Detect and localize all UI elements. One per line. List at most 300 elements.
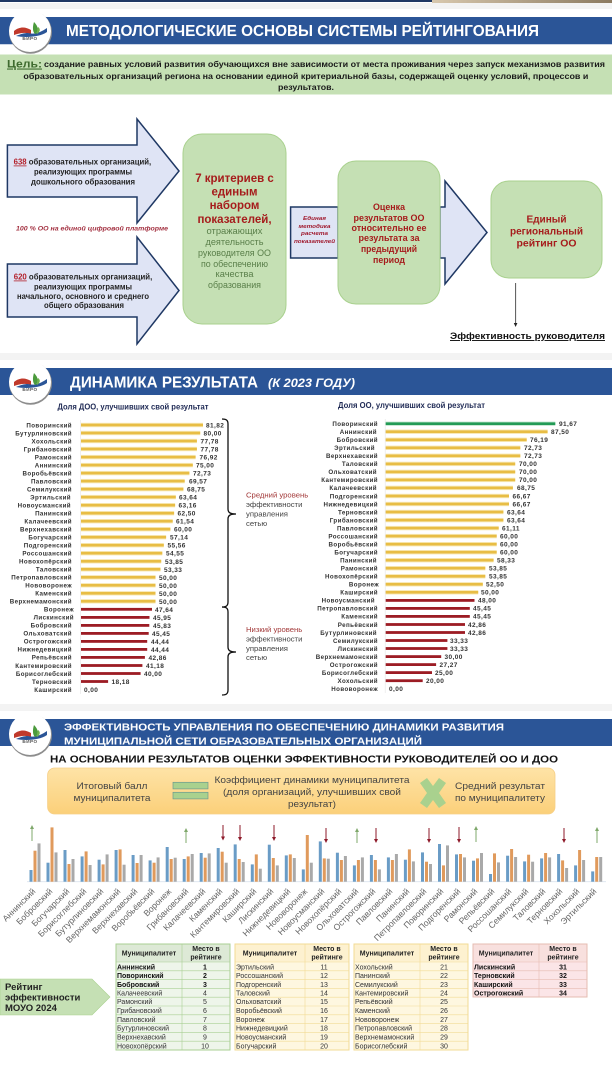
arrow: school organisations: общего образования <box>44 301 124 310</box>
label: low level: управления <box>246 644 288 653</box>
bar chart: schools share: 42,86 <box>468 622 486 629</box>
arrow: preschool organisations <box>7 119 179 223</box>
label: middle level: управления <box>246 510 288 518</box>
axis labels: Борисоглебский <box>36 886 89 939</box>
bar chart: preschool share: 81,82 <box>206 422 224 430</box>
criteria heading <box>195 173 274 226</box>
axis labels: Кантемировский <box>188 886 242 940</box>
callout: rating label: эффективности <box>5 992 80 1004</box>
bar chart: schools share: Ольховатский <box>328 469 377 476</box>
table: places 21-30: Борисоглебский <box>355 1042 407 1050</box>
bar chart: preschool share: 63,64 <box>179 495 197 502</box>
label: manager efficiency: Эффективность руководителя <box>450 331 605 342</box>
bar chart: preschool share: 50,00 <box>159 583 177 590</box>
criteria heading: показателей, <box>197 214 272 226</box>
table: places 1-10: 10 <box>201 1044 209 1050</box>
bar chart: preschool share: Грибановский <box>24 446 72 453</box>
bar chart: preschool share: 54,55 <box>166 551 184 558</box>
axis labels: Грибановский <box>145 886 191 932</box>
bar chart: schools share: 63,64 <box>507 517 525 524</box>
bar chart: preschool share: Таловский <box>36 567 72 574</box>
bar chart: schools share: Терновский <box>338 509 378 516</box>
bar chart: preschool share: Богучарский <box>28 534 72 542</box>
bar chart: preschool share: Острогожский <box>24 639 72 646</box>
bar chart: schools share: Воробьёвский <box>329 542 378 548</box>
formula: total score <box>74 781 151 803</box>
arrow: school organisations <box>7 237 179 344</box>
icon: BIRO logo: БИРО <box>22 739 38 744</box>
axis labels: Бутурлиновский <box>53 886 106 939</box>
table: places 11-20: Ольховатский <box>236 998 281 1006</box>
panel: results assessment: относительно ее <box>352 223 426 233</box>
bar chart: preschool share: Терновский <box>32 679 72 686</box>
bar chart: preschool share: Павловский <box>31 478 72 485</box>
table: places 21-30: Кантемировский <box>355 990 408 998</box>
table: places 1-10: Рамонский <box>117 998 152 1006</box>
arrow: school organisations: начального, основного и среднего <box>17 292 149 301</box>
axis labels: Богучарский <box>29 886 72 928</box>
axis labels: Верхнехавский <box>90 886 140 936</box>
arrow: to unified rating <box>440 181 487 284</box>
formula: total score: муниципалитета <box>74 793 151 803</box>
criteria heading: 7 критериев с <box>195 173 274 185</box>
table: places 1-10: Поворинский <box>117 972 164 980</box>
bar chart: schools share: 70,00 <box>519 477 537 484</box>
section title <box>64 722 504 748</box>
bar chart: preschool share: 50,00 <box>159 599 177 606</box>
table: places 21-30: Муниципалитет <box>360 950 415 958</box>
panel: results assessment: период <box>373 255 405 265</box>
bar chart: preschool share: Воробьёвский <box>23 470 72 477</box>
table: places 11-20: Эртильский <box>236 964 274 972</box>
table: places 1-10: Калачеевский <box>117 990 162 998</box>
bar chart: preschool share: Хохольский <box>32 438 72 445</box>
bar chart: schools share: 60,00 <box>500 533 518 540</box>
bar chart: preschool share: 40,00 <box>144 671 162 678</box>
table: places 11-20: Место в <box>313 946 341 953</box>
bar chart: schools share: 45,45 <box>473 614 491 621</box>
panel: unified methodology: показателей <box>294 238 335 245</box>
table: places 21-30: Каменский <box>355 1007 390 1015</box>
table: places 11-20: 11 <box>320 964 328 972</box>
bar chart: schools share: Калачеевский <box>329 485 377 492</box>
formula: total score: Итоговый балл <box>76 781 148 791</box>
table: places 11-20: 12 <box>320 973 328 980</box>
bar chart: schools share: Воронеж <box>349 582 379 589</box>
table: places 31-34: Место в <box>549 946 577 953</box>
label: middle level: сетью <box>246 519 267 528</box>
bar chart: preschool share: Каменский <box>35 591 72 598</box>
brace: low level <box>222 607 236 695</box>
formula: dynamics coefficient: Коэффициент динамики муниципалитета <box>214 775 410 785</box>
icon: BIRO logo <box>9 713 52 757</box>
table: places 31-34: Лискинский <box>474 964 515 972</box>
bar chart: schools share: Панинский <box>340 558 377 564</box>
bar chart: schools share: 68,75 <box>517 485 535 492</box>
axis labels: Лискинский <box>236 886 276 926</box>
bar chart: preschool share: Петропавловский <box>11 575 72 582</box>
subtitle: НА ОСНОВАНИИ РЕЗУЛЬТАТОВ ОЦЕНКИ ЭФФЕКТИВНОСТИ РУКОВОДИТЕЛЕЙ ОО И ДОО <box>50 753 558 766</box>
bar chart: preschool share: 77,78 <box>200 438 219 446</box>
table: places 1-10: 3 <box>203 982 207 989</box>
bar chart: preschool share: Борисоглебский <box>16 671 72 678</box>
bar chart: preschool share: 53,85 <box>165 559 183 566</box>
axis labels <box>0 886 599 945</box>
arrow: to manager efficiency <box>514 283 517 327</box>
table: places 1-10: Место в <box>192 946 220 953</box>
bar chart: schools share: 0,00 <box>389 686 403 693</box>
bar chart: schools share: Нововоронеж <box>331 686 378 693</box>
table: places 11-20: Воробьёвский <box>236 1007 282 1015</box>
table: places 31-34: Терновский <box>474 972 515 980</box>
bar chart: schools share: Репьёвский <box>338 622 378 629</box>
table: places 21-30: 25 <box>440 999 448 1006</box>
goal text: создание равных условий развития обучающихся вне зависимости от места проживания через запуск механизмов развития <box>44 59 605 69</box>
table: places 1-10: 8 <box>203 1026 207 1033</box>
bar chart: preschool share: 45,95 <box>153 615 171 622</box>
bar chart: schools share: Новохопёрский <box>325 574 378 581</box>
icon: BIRO logo: БИРО <box>22 387 38 392</box>
formula: average result: по муниципалитету <box>455 793 545 803</box>
table: places 11-20: 17 <box>320 1017 328 1024</box>
bar chart: schools share: Рамонский <box>341 566 378 572</box>
bar chart: schools share: Павловский <box>337 525 378 532</box>
bar chart: preschool share: 77,78 <box>200 446 219 454</box>
bar chart: schools share: Грибановский <box>330 517 378 524</box>
criteria heading: единым <box>211 186 258 198</box>
bar chart: schools share: 52,50 <box>486 582 504 589</box>
table: places 11-20: рейтинге <box>311 954 343 962</box>
bar chart: schools share: 66,67 <box>512 501 531 508</box>
axis labels: Воробьёвский <box>109 886 157 933</box>
bar chart: schools share: 60,00 <box>500 542 518 548</box>
panel: unified methodology: Единая <box>303 216 327 222</box>
bar chart: preschool share: Россошанский <box>22 550 72 558</box>
table: places 31-34: 31 <box>559 964 567 972</box>
table: places 11-20: Воронеж <box>236 1017 265 1024</box>
bar chart: schools share: Россошанский <box>328 533 378 540</box>
goal text <box>23 59 605 92</box>
table: places 31-34: рейтинге <box>547 954 579 962</box>
bar chart: schools share: Семилукский <box>333 638 378 645</box>
panel: formula <box>48 768 555 814</box>
bar chart: preschool share: Семилукский <box>27 486 72 493</box>
formula: average result <box>455 781 546 803</box>
label: low level: сетью <box>246 653 267 662</box>
axis labels: Эртильский <box>558 886 599 926</box>
arrow: preschool organisations: 638 образовательных организаций, <box>14 158 151 166</box>
table: places 21-30: Хохольский <box>355 964 393 972</box>
bar chart: schools share: 42,86 <box>468 630 486 637</box>
criteria description: по обеспечению <box>201 259 268 269</box>
bar chart: preschool share: Репьёвский <box>32 655 72 662</box>
table: places 21-30: 22 <box>440 973 448 980</box>
bar chart: schools share: Бутурлиновский <box>320 630 377 637</box>
axis labels: Каширский <box>220 886 259 924</box>
table: places 11-20: Муниципалитет <box>243 950 298 958</box>
chart title: schools: Доля ОО, улучшивших свой результат <box>338 401 485 410</box>
axis labels: Таловский <box>511 886 548 923</box>
panel: 7 criteria <box>183 134 286 324</box>
chart: municipal dynamics columns <box>0 825 606 945</box>
axis labels: Поворинский <box>401 886 446 930</box>
banner: methodology heading <box>0 17 612 45</box>
bar chart: preschool share: Воронеж <box>44 607 74 614</box>
table: places 11-20: Таловский <box>236 990 270 998</box>
bar chart: preschool share: 72,73 <box>193 471 211 478</box>
bar chart: preschool share: 45,83 <box>153 623 171 630</box>
axis labels: Россошанский <box>466 886 514 934</box>
label: middle level: Средний уровень <box>246 490 308 500</box>
table: places 1-10 <box>116 944 230 1050</box>
table: places 21-30: 26 <box>440 1008 448 1015</box>
arrow: preschool organisations: дошкольного образования <box>31 178 135 186</box>
panel: unified methodology: методика <box>298 224 331 230</box>
top strip <box>0 0 612 9</box>
bar chart: preschool share: 45,45 <box>152 631 170 638</box>
table: places 1-10: Муниципалитет <box>122 950 177 958</box>
table: places 31-34: 34 <box>559 991 567 998</box>
bar chart: preschool share: 42,86 <box>148 655 167 662</box>
axis labels: Нововоронеж <box>264 886 310 932</box>
bar chart: preschool share: 44,44 <box>151 639 169 646</box>
bar chart: preschool share: Новоусманский <box>18 502 71 510</box>
table: places 31-34: 32 <box>559 973 567 980</box>
panel: unified rating <box>491 181 602 278</box>
icon: BIRO logo <box>9 10 52 54</box>
bar chart: schools share: 33,33 <box>450 646 468 653</box>
table: places 11-20: 19 <box>320 1034 328 1041</box>
bar chart: preschool share: 57,14 <box>170 535 188 542</box>
bar chart: preschool share: Кантемировский <box>15 663 72 670</box>
panel: unified rating: рейтинг ОО <box>516 238 576 250</box>
bar chart: preschool share: 18,18 <box>112 679 130 686</box>
arrows: falling municipalities <box>221 825 566 843</box>
bar chart: schools share: Кантемировский <box>321 477 378 484</box>
bar chart: schools share: Аннинский <box>340 429 377 436</box>
callout: rating label <box>0 979 110 1015</box>
axis labels: Бобровский <box>14 886 55 927</box>
table: places 1-10: Бобровский <box>117 981 159 989</box>
bar chart: preschool share: Бобровский <box>31 623 72 630</box>
table: places 11-20 <box>235 944 349 1050</box>
bar chart: schools share <box>316 419 577 693</box>
panel: results assessment: Оценка <box>373 202 406 212</box>
chart title: preschool: Доля ДОО, улучшивших свой результат <box>58 402 209 412</box>
bar chart: preschool share: Поворинский <box>26 422 72 429</box>
bar chart: preschool share: 41,18 <box>146 663 164 670</box>
axis labels: Петропавловский <box>372 886 429 943</box>
section title: ДИНАМИКА РЕЗУЛЬТАТА <box>70 374 258 391</box>
bar chart: schools share: Петропавловский <box>317 606 378 613</box>
arrow: school organisations: реализующих программы <box>34 282 132 292</box>
axis labels: Ольховатский <box>314 886 361 933</box>
axis labels: Репьёвский <box>457 886 497 926</box>
axis labels: Воронеж <box>141 886 174 918</box>
bar chart: preschool share: 47,64 <box>155 607 173 614</box>
bar chart: schools share: Верхнемамонский <box>316 654 378 661</box>
table: places 21-30: Верхнемамонский <box>355 1033 414 1041</box>
bar chart: preschool share: 69,57 <box>189 479 207 486</box>
axis labels: Хохольский <box>542 886 582 926</box>
formula: dynamics coefficient: результат) <box>288 799 336 809</box>
panel: results assessment: результатов ОО <box>354 213 424 223</box>
banner: result dynamics heading <box>0 368 612 395</box>
bar chart: preschool share: Верхнемамонский <box>10 599 72 606</box>
axis labels: Панинский <box>374 886 412 924</box>
bar chart: schools share: Хохольский <box>338 678 378 685</box>
callout: rating label: Рейтинг <box>5 982 42 993</box>
section subtitle: (К 2023 ГОДУ) <box>268 378 355 390</box>
bar chart: schools share: 30,00 <box>444 654 463 661</box>
axis labels: Калачеевский <box>161 886 208 933</box>
panel: unified rating: Единый <box>526 214 566 226</box>
axis labels: Новоусманский <box>276 886 327 937</box>
bar chart: preschool share: Эртильский <box>30 494 71 501</box>
icon: BIRO logo: БИРО <box>22 36 38 41</box>
axis labels: Аннинский <box>0 886 38 923</box>
bar chart: preschool share <box>10 420 224 694</box>
bar chart: schools share: 25,00 <box>435 670 453 677</box>
criteria description: деятельность <box>206 237 264 247</box>
bar chart: schools share: 45,45 <box>473 606 491 613</box>
caption: digital platform: 100 % ОО на единой цифровой платформе <box>16 224 168 232</box>
table: places 1-10: 7 <box>203 1017 207 1024</box>
table: places 1-10: 4 <box>203 991 207 998</box>
table: places 1-10: Новохопёрский <box>117 1042 167 1050</box>
criteria description: отражающих <box>206 226 263 236</box>
axis labels: Нижнедевицкий <box>240 886 293 938</box>
arrow: preschool organisations: реализующих программы <box>34 168 132 176</box>
goal label: Цель: <box>7 58 42 70</box>
table: places 1-10: рейтинге <box>190 954 222 962</box>
bar chart: schools share: 61,11 <box>502 525 520 532</box>
bar chart: schools share: Верхнехавский <box>326 453 378 460</box>
panel: results assessment: предыдущий <box>361 244 417 254</box>
table: places 11-20: Подгоренский <box>236 981 281 989</box>
bar chart: schools share: Новоусманский <box>322 598 375 605</box>
table: places 11-20: Богучарский <box>236 1042 276 1050</box>
bar chart: preschool share: Лискинский <box>34 615 74 622</box>
bar chart: schools share: 72,73 <box>524 453 542 460</box>
table: places 11-20: 15 <box>320 999 328 1006</box>
table: places 21-30: Репьёвский <box>355 998 393 1006</box>
bar chart: preschool share: Рамонский <box>35 454 72 461</box>
bar chart: preschool share: Новохопёрский <box>19 559 72 566</box>
bar chart: preschool share: 50,00 <box>159 575 177 582</box>
table: places 1-10: 1 <box>203 964 207 972</box>
bar chart: schools share: 60,00 <box>500 550 518 556</box>
bar chart: schools share: 20,00 <box>426 678 444 685</box>
table: places 21-30: Место в <box>430 946 458 953</box>
bar chart: preschool share: 76,92 <box>200 455 218 462</box>
formula: dynamics coefficient: (доля организаций, улучшивших свой <box>223 787 401 797</box>
bar chart: schools share: Нижнедевицкий <box>323 501 378 508</box>
bar chart: preschool share: Нижнедевицкий <box>17 647 72 654</box>
bar chart: preschool share: 68,75 <box>187 487 205 494</box>
table: places 21-30: 23 <box>440 982 448 989</box>
table: places 1-10: Верхнехавский <box>117 1033 166 1041</box>
bar chart: schools share: 66,67 <box>512 493 531 500</box>
table: places 11-20: Новоусманский <box>236 1033 286 1041</box>
bar chart: preschool share: 80,00 <box>204 430 222 438</box>
criteria heading: набором <box>210 200 259 212</box>
table: places 11-20: 18 <box>320 1026 328 1033</box>
table: places 1-10: 6 <box>203 1008 207 1015</box>
axis labels: Павловский <box>354 886 395 927</box>
panel: unified methodology <box>291 207 338 258</box>
axis labels: Верхнемамонский <box>64 886 123 945</box>
bar chart: schools share: 72,73 <box>524 445 542 452</box>
icon: equals <box>173 782 208 799</box>
table: places 11-20: 13 <box>320 982 328 989</box>
panel: results assessment <box>338 161 440 304</box>
table: places 1-10: Аннинский <box>117 964 155 972</box>
bar chart: preschool share: Ольховатский <box>23 631 72 638</box>
table: places 31-34: 33 <box>559 982 567 989</box>
title: МЕТОДОЛОГИЧЕСКИЕ ОСНОВЫ СИСТЕМЫ РЕЙТИНГОВАНИЯ <box>66 21 539 40</box>
table: places 1-10: Павловский <box>117 1016 156 1024</box>
bar chart: schools share: 70,00 <box>519 461 537 468</box>
table: places 31-34: Муниципалитет <box>479 950 534 958</box>
axis labels: Острогожский <box>331 886 378 933</box>
table: places 21-30: 21 <box>440 964 448 972</box>
table: places 1-10: 5 <box>203 999 207 1006</box>
bar chart: schools share: Острогожский <box>330 662 378 669</box>
table: places 21-30: Панинский <box>355 972 390 980</box>
table: places 21-30: Семилукский <box>355 981 398 989</box>
table: places 21-30: 30 <box>440 1044 448 1050</box>
bar chart: schools share: 50,00 <box>481 590 499 597</box>
bar chart: schools share: Бобровский <box>337 437 378 444</box>
banner: management efficiency heading <box>0 719 612 748</box>
bar chart: schools share: 87,50 <box>551 429 569 436</box>
label: low level <box>246 625 302 662</box>
formula: dynamics coefficient <box>214 775 410 809</box>
bar chart: preschool share: Подгоренский <box>24 542 72 550</box>
table: places 31-34 <box>473 944 587 998</box>
bar chart: schools share: Таловский <box>342 461 378 468</box>
axis labels: Подгоренский <box>416 886 463 933</box>
table: places 31-34: Острогожский <box>474 990 523 998</box>
table: places 21-30: 28 <box>440 1026 448 1033</box>
table: places 21-30: 29 <box>440 1034 448 1041</box>
goal text: образовательных организаций региона на основании единой критериальной базы, содержащей оценку условий, процессов и <box>23 71 588 81</box>
criteria description: руководителя ОО <box>198 248 271 258</box>
bar chart: preschool share: 44,44 <box>151 647 169 654</box>
table: places 1-10: 2 <box>203 973 207 980</box>
panel: results assessment: результата за <box>358 233 420 243</box>
bar chart: schools share: Каменский <box>341 614 378 621</box>
bar chart: schools share: Каширский <box>340 590 378 597</box>
table: places 31-34: Каширский <box>474 981 513 989</box>
formula: average result: Средний результат <box>455 781 546 791</box>
bar chart: preschool share: Панинский <box>35 510 72 518</box>
axis labels: Терновский <box>525 886 565 926</box>
bar chart: schools share: Поворинский <box>332 421 378 428</box>
bar chart: preschool share: Нововоронеж <box>25 583 72 590</box>
table: places 11-20: 16 <box>320 1008 328 1015</box>
bar chart: preschool share: 75,00 <box>196 463 214 470</box>
bar chart: preschool share: Каширский <box>34 687 72 694</box>
criteria description: образования <box>208 280 261 290</box>
axis labels: Каменский <box>187 886 225 924</box>
bar chart: schools share: Подгоренский <box>330 493 378 500</box>
table: places 11-20: Россошанский <box>236 972 283 980</box>
table: places 1-10: Грибановский <box>117 1007 162 1015</box>
table: places 21-30: рейтинге <box>428 954 460 962</box>
label: low level: Низкий уровень <box>246 625 302 634</box>
